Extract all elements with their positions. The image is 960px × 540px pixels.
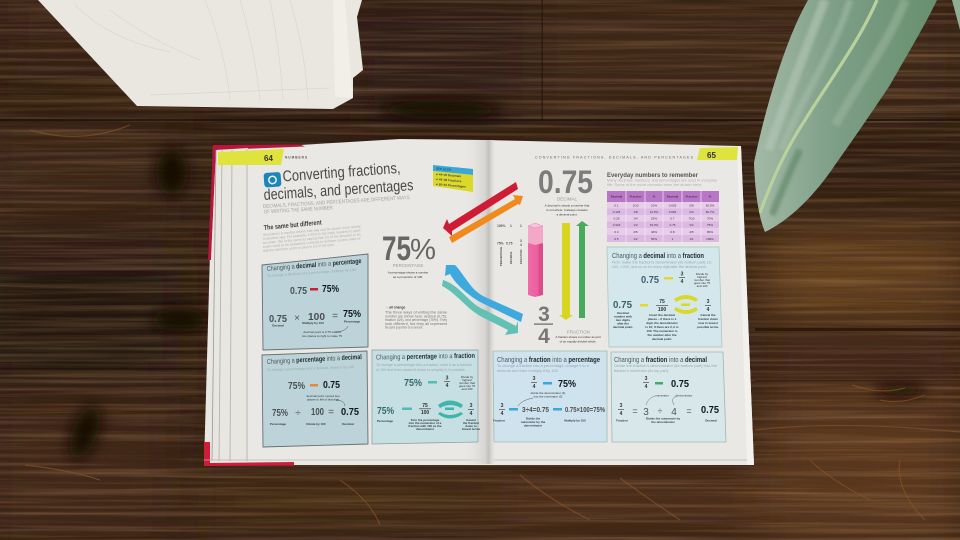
panel: fraction into percentage: 3÷4=0.75 [522,407,549,414]
panel: percentage into fraction: To change a percentage into a fraction, write it as a fraction [376,363,472,367]
panel: decimal into fraction: digit, the denominator [646,321,679,325]
panel: percentage into decimal: Decimal [342,422,354,426]
panel: decimal into fraction [607,247,722,347]
right page header [535,147,738,160]
big number: 75 percent [382,230,436,279]
panel: fraction into percentage [493,351,607,442]
section: the same but different: Sometimes a number shown one way can be shown more clearly [263,224,361,237]
panel: fraction into percentage: denominator [524,424,543,428]
see also box [433,165,473,192]
panel: percentage into decimal: 0.75 [323,380,340,391]
table of equivalents: % [709,194,712,198]
arrow: blue [445,265,523,322]
panel: fraction into decimal: 4 [645,384,648,390]
panel: fraction into percentage: Multiply by 100 [564,418,586,422]
panel: percentage into fraction: lowest terms [462,427,480,431]
panel: decimal into fraction: is 10; if there are 2, it is [645,325,679,329]
panel: decimal into percentage: 75% [322,284,339,295]
panel: decimal into fraction: now to lowest [698,321,718,325]
table of equivalents: 0.4 [614,230,619,234]
arrow: yellow down [559,223,573,320]
panel: decimal into percentage: two places to right to make 75 [302,334,342,338]
table of equivalents: 40% [651,230,657,234]
panel: fraction into decimal: Divide the fraction's denominator (its bottom part) into the [614,364,717,368]
panel: decimal into fraction: 100, 1,000, and so on for every digit after the decimal point. [612,265,707,269]
table of equivalents: 0.7 [670,216,675,220]
bar labels: DECIMAL [509,251,513,264]
panel: fraction into decimal: fraction's numerator (its top part). [614,369,669,373]
table of equivalents: 12.5% [650,210,659,214]
table of equivalents: 1/8 [633,210,638,214]
table of equivalents: 0.1 [614,204,619,208]
table of equivalents: 1 [672,237,674,241]
panel: percentage into fraction: Divide by [461,375,474,379]
arrow: teal [442,280,518,335]
big fraction: 4 [538,325,550,348]
panel: decimal into fraction: 4 [707,307,710,313]
text: all change: look different, but they all represent [385,322,447,326]
table of equivalents: 3/4 [689,223,694,227]
panel: fraction into decimal: 4 [620,411,623,417]
left page header: 64 [264,154,273,163]
table of equivalents: 2/5 [633,230,638,234]
panel: percentage into fraction: 100 [421,410,429,416]
section: the same but different [263,219,362,253]
table of equivalents: 33.3% [650,223,659,227]
panel: percentage into fraction: goes into 75 [459,384,475,388]
table of equivalents: Decimal [611,194,622,198]
panel: decimal into fraction: Insert the decimal [649,313,675,317]
bar labels: 1 [520,224,522,228]
panel: decimal into fraction: number that [694,278,710,282]
panel: decimal into fraction: after the [617,322,629,326]
panel: percentage into decimal: 100 [311,407,324,418]
table of equivalents: 0.333 [613,223,621,227]
panel: decimal into percentage [262,254,368,350]
open book [204,139,754,466]
panel: decimal into fraction: two digits [616,318,630,322]
panel: percentage into decimal: 75% [288,381,305,392]
table of equivalents: 70% [707,216,713,220]
panel: decimal into percentage: × [294,313,300,324]
panel: percentage into fraction: highest [462,378,472,382]
subtitle [263,195,410,215]
panel: decimal into percentage: Decimal [272,324,284,328]
section: the same but different: The same but different [264,219,323,232]
panel: fraction into percentage: 4 [501,411,504,417]
table of equivalents: 2/3 [689,210,694,214]
bar labels [497,224,523,266]
book pages [204,139,754,465]
panel: decimal into fraction: fraction down [698,317,718,321]
panel: percentage into fraction [372,350,480,444]
panel: fraction into decimal: Changing a fraction into a decimal [614,357,707,364]
panel: decimal into fraction: and 100 [697,284,708,288]
big number: decimal: DECIMAL [557,196,577,202]
big number: decimal [538,164,593,216]
3D pink bar [528,223,543,297]
panel: decimal into fraction: 100 [658,307,666,313]
big number: 75 percent: PERCENTAGE [393,263,423,268]
section: the same but different: in another way. For example, if 20% is the mark required to pass [263,228,361,241]
panel: fraction into percentage: Changing a fraction into a percentage [497,357,600,364]
big number: decimal: 0.75 [538,164,593,200]
panel: percentage into decimal: = [328,407,334,418]
see also box: ◄ 44–45 Decimals [435,172,462,178]
big number: decimal: A decimal is simply a number that [545,204,590,208]
panel: decimal into fraction: goes into 75 [694,281,710,285]
panel: percentage into decimal: 75% [272,408,288,419]
panel: fraction into decimal: Divide the numerator by [646,416,680,420]
panel: fraction into percentage: To change a fraction into a percentage, change it to a [497,364,589,368]
panel: fraction into decimal: = [686,406,692,416]
panel: fraction into decimal: numerator [655,394,669,398]
white object at top [38,0,363,109]
panel: decimal into percentage: 75% [343,309,361,320]
panel: percentage into decimal [262,351,368,447]
table of equivalents: 4/5 [689,230,694,234]
table of equivalents: 0.125 [613,210,621,214]
panel: decimal into percentage: Changing a decimal into a percentage [267,258,362,273]
panel: percentage into fraction: Changing a percentage into a fraction [376,353,475,361]
panel: decimal into fraction: decimal point. [613,325,633,329]
page edge right [737,146,754,465]
panel: fraction into decimal [611,352,726,442]
panel: percentage into fraction: 75 [422,403,428,409]
panel: fraction into decimal: 3 [645,376,648,382]
panel: fraction into percentage: decimal and then multiply it by 100. [497,369,559,373]
arrow: orange [449,195,523,243]
panel: decimal into fraction: 0.75 [613,300,632,311]
panel: decimal into percentage: Multiply by 100 [302,321,324,325]
text: all change: number are shown here: decimal (0.75), [385,314,447,318]
panel: fraction into decimal: Fraction [616,418,628,422]
bar labels: 100% [497,224,506,228]
bar labels: 3 [520,239,522,243]
table of equivalents: % [653,194,656,198]
panel: fraction into decimal: the denominator [651,420,676,424]
table of equivalents [607,191,719,242]
title [263,160,414,204]
panel: decimal into fraction: First, make the fraction's denominator (its bottom part) 10, [612,260,712,264]
panel: percentage into fraction: 3 [446,376,449,382]
section: everyday numbers: Many decimals, fractions, and percentages are used in everyday [607,178,717,182]
section: the same but different: an exam, this is the same as saying that 1/5 of the answers in an [263,232,361,245]
panel: decimal into percentage: To change a decimal into a percentage, multiply by 100. [267,268,357,278]
panel: percentage into fraction: Cancel [466,418,476,422]
panel: decimal into percentage: 0.75 [269,314,287,325]
panel: percentage into decimal: 0.75 [341,407,359,418]
panel: fraction into decimal: 0.75 [671,379,689,390]
panel: decimal into percentage: 100 [308,312,325,323]
panel: percentage into decimal: Changing a percentage into a decimal [267,354,362,366]
table of equivalents: 5/8 [689,204,694,208]
arrow: green up [576,221,589,318]
left page header: NUMBERS [285,156,308,160]
big fraction: of an equally divided whole. [560,340,597,344]
table of equivalents: 62.5% [706,204,715,208]
bar labels: PERCENTAGE [499,247,503,266]
panel: decimal into fraction: possible terms. [697,325,719,329]
table of equivalents: Fraction [686,194,698,198]
bar labels: FRACTION [519,250,523,264]
text: all change: the same proportion of an amount. [385,326,423,330]
title: decimals, and percentages [263,177,414,204]
table of equivalents: 1/4 [633,216,638,220]
icon: blue circle [263,172,281,188]
panel: fraction into decimal: = [632,406,638,416]
panel: percentage into fraction: of 100 and then cancel it down to simplify it, if possible. [376,368,466,372]
panel: fraction into decimal: 0.75 [701,405,719,416]
big fraction: A fraction shows a number as part [555,335,601,339]
panel: decimal into fraction: number with [614,314,632,318]
panel: decimal into percentage: decimal point is 0.75 moved [303,330,341,334]
big fraction [534,303,601,348]
panel: fraction into percentage: divide the denominator (4) [531,391,565,395]
red cover edge [204,144,305,466]
panel: fraction into percentage: Fraction [493,418,505,422]
panel: decimal into percentage: = [332,311,338,322]
bar labels: 4 [520,243,522,247]
table of equivalents: 0.75 [670,223,676,227]
panel: decimal into fraction: 4 [681,279,684,285]
big number: 75 percent: 75 [382,230,411,268]
table of equivalents: 0.8 [670,230,675,234]
panel: fraction into decimal: 3 [620,403,623,409]
panel: percentage into fraction: number that [459,381,475,385]
panel: decimal into percentage: 0.75 [290,286,307,297]
table of equivalents: 10% [651,204,657,208]
panel: decimal into fraction: Cancel the [700,313,716,317]
table of equivalents: 1/2 [633,237,638,241]
panel: decimal into fraction: highest [697,275,707,279]
panel: fraction into decimal: denominator [676,394,692,398]
panel: percentage into fraction: denominator [416,427,435,431]
table of equivalents: 1/3 [633,223,638,227]
panel: percentage into fraction: 4 [470,411,473,417]
table of equivalents: 66.7% [706,210,715,214]
panel: decimal into fraction: Changing a decimal into a fraction [612,253,704,260]
panel: percentage into fraction: fraction with 100 as the [408,424,442,428]
panel: percentage into decimal: places to left of last digit [307,398,339,402]
panel: percentage into decimal: decimal point moved two [306,394,340,398]
text: all change: → all change [385,306,406,310]
panel: fraction into decimal: 4 [671,407,677,418]
bar labels: 1 [510,224,512,228]
right page header: CONVERTING FRACTIONS, DECIMALS, AND PERCENTAGES [535,156,694,160]
table of equivalents: 1/1 [689,237,694,241]
big number: 75 percent: as a proportion of 100. [393,275,423,279]
table of equivalents: 0.625 [669,204,677,208]
table of equivalents: 0.666 [669,210,677,214]
panel: percentage into fraction: 3 [470,403,473,409]
big number: 75 percent: % [410,234,436,266]
table of equivalents: 75% [707,223,713,227]
bar labels: 75% [497,242,504,246]
panel: decimal into percentage: Percentage [344,320,360,324]
page stack [210,148,248,462]
section: everyday numbers: Everyday numbers to remember [607,172,698,179]
section: everyday numbers: life. Some of the more common ones are shown here. [607,183,702,187]
panel: percentage into fraction: Turn the percentage [411,418,440,422]
panel: percentage into fraction: Percentage [377,419,393,423]
panel: decimal into fraction: 3 [681,272,684,278]
see also box: ◄ 60–61 Percentages [435,182,466,189]
panel: percentage into fraction: 75% [404,378,422,389]
table of equivalents: Decimal [667,194,678,198]
table of equivalents: 0.5 [614,237,619,241]
panel: percentage into decimal: To change a percentage into a decimal, divide it by 100. [267,365,355,372]
section: the same but different: that the minimum score to pass is 0.2 of the total. [263,243,335,253]
panel: fraction into decimal: ÷ [658,406,663,416]
big number: 75 percent: A percentage shows a number [388,270,428,274]
panel: percentage into decimal: Percentage [270,422,286,426]
panel: decimal into fraction: decimal point. [652,337,672,341]
panel: fraction into decimal: 3 [643,407,649,418]
table of equivalents: 100% [706,237,714,241]
right page header: 65 [707,151,716,160]
panel: percentage into decimal: Divide by 100 [306,422,326,426]
panel: fraction into percentage: 3 [501,403,504,409]
panel: percentage into fraction: down to [465,424,477,428]
gutter shadow [462,140,496,464]
panel: fraction into decimal: Decimal [705,418,717,422]
subtitle: OF WRITING THE SAME NUMBER. [264,205,334,215]
panel: percentage into fraction: the fraction [463,421,479,425]
panel: fraction into percentage: into the numerator (3) [534,394,562,398]
section: everyday numbers [607,172,717,187]
panel: decimal into fraction: 0.75 [641,275,659,286]
text: all change: fraction (3/4), and percentage (75%). They [385,318,447,322]
big number: decimal: is not whole. It always contains [546,208,588,212]
text: all change: The three ways of writing the same [385,310,447,314]
see also box: ◄ 46–49 Fractions [435,177,462,183]
panel: fraction into percentage: numerator by the [521,420,546,424]
plant leaf [754,0,960,232]
panel: fraction into percentage: 75% [558,379,576,390]
panel: decimal into fraction: 3 [707,299,710,305]
panel: fraction into percentage: Divide the [526,416,540,420]
table of equivalents: 1/10 [633,204,639,208]
big fraction: 3 [538,303,550,326]
table of equivalents: 25% [651,216,657,220]
panel: percentage into fraction: 75% [377,406,394,417]
table of equivalents: Fraction [630,194,642,198]
panel: fraction into percentage: 0.75×100=75% [565,407,606,414]
table of equivalents: 7/10 [689,216,695,220]
text: all change [385,306,447,330]
panel: decimal into fraction: Decimal [617,311,629,315]
panel: decimal into fraction: Divide by [696,272,709,276]
table of equivalents: 0.25 [614,216,620,220]
table of equivalents: 80% [707,230,713,234]
arrow: red [443,182,518,236]
panel: decimal into fraction: the number after the [647,333,677,337]
section: the same but different: exam need to be answered correctly to achieve a pass mark or [263,236,362,249]
table of equivalents: 50% [651,237,657,241]
left page header [218,149,308,165]
panel: decimal into fraction: 100. The numerator is [646,329,678,333]
panel: decimal into fraction: 75 [659,299,665,305]
panel: percentage into fraction: into the numerator of a [409,421,442,425]
big number: decimal: a decimal point. [556,212,578,216]
panel: percentage into fraction: 4 [446,383,449,389]
panel: fraction into percentage: 3 [533,376,536,382]
see also box: SEE ALSO [436,167,452,172]
panel: decimal into fraction: places – if there is 1 [648,317,677,321]
panel: fraction into percentage: 4 [533,384,536,390]
big fraction: FRACTION [567,330,590,334]
title: Converting fractions, [282,160,401,185]
bar labels: 0.75 [506,242,513,246]
subtitle: DECIMALS, FRACTIONS, AND PERCENTAGES ARE DIFFERENT WAYS [263,195,410,210]
panel: percentage into decimal: ÷ [295,408,301,419]
panel: percentage into fraction: and 100 [462,387,473,391]
